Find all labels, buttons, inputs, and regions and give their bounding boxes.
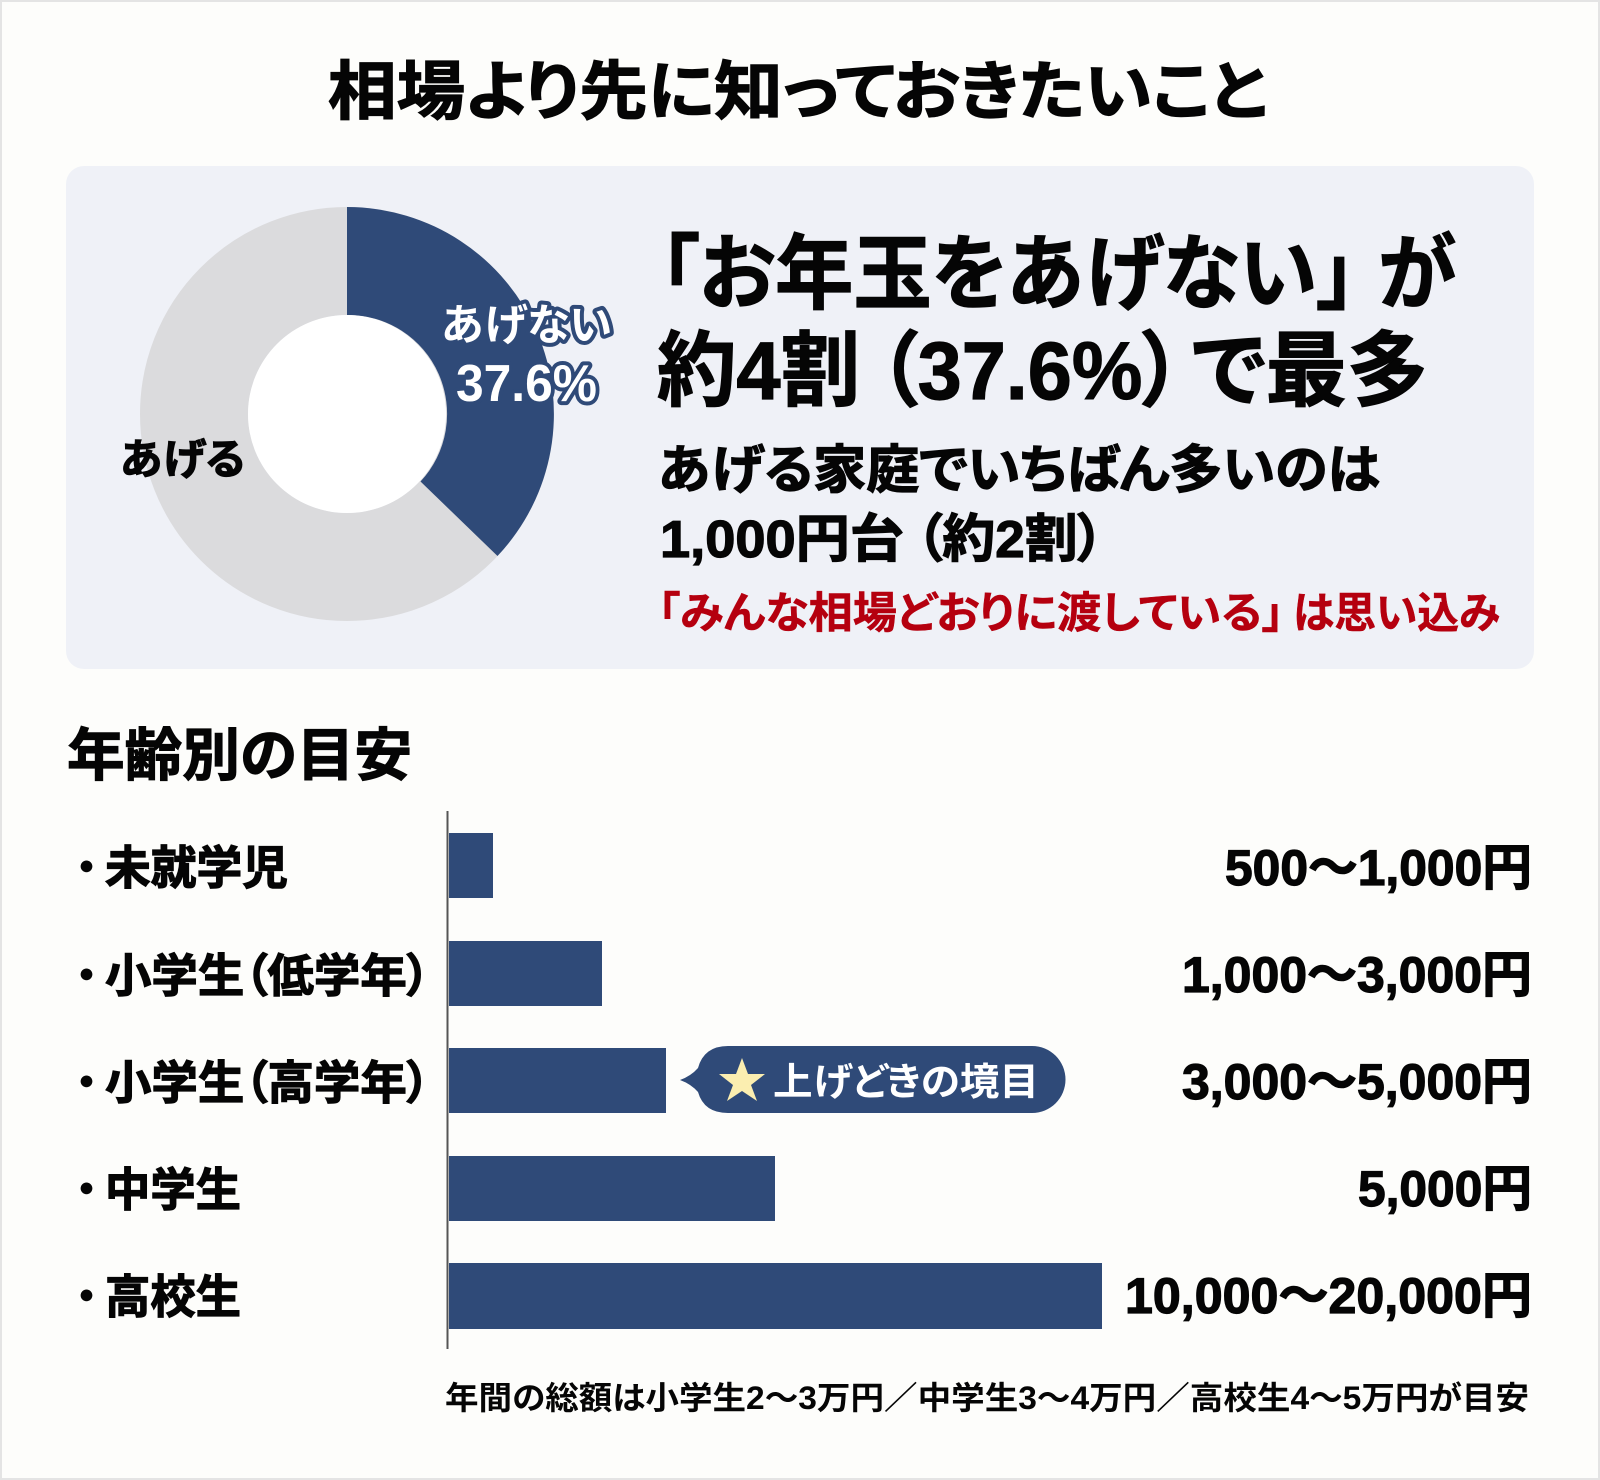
headline: 「お年玉をあげない」 — [660, 229, 1356, 320]
row: junior high: ・ — [75, 1164, 98, 1216]
red callout text: 「みんな相場どおりに渡している」 — [658, 590, 1284, 638]
donut label: does not give: あげない — [441, 302, 612, 350]
row: lower elementary: 1,000〜3,000円 — [1182, 947, 1532, 1003]
bar chart — [75, 811, 1532, 1349]
row: lower elementary: 小学生（低学年） — [105, 950, 430, 1002]
row: lower elementary: ・ — [75, 950, 98, 1002]
row: high school: 10,000〜20,000円 — [1125, 1268, 1532, 1324]
subheading: 1,000円台 — [660, 511, 904, 569]
red callout text: は思い込み — [1293, 590, 1500, 638]
headline: で最多 — [1192, 326, 1428, 417]
donut segment: does not give 37.6% — [347, 207, 554, 556]
row: preschool: 未就学児 — [105, 842, 288, 894]
headline: が — [1378, 229, 1456, 320]
subheading — [658, 442, 1380, 569]
donut chart — [120, 207, 612, 567]
donut label: gives: あげる — [120, 436, 245, 483]
row: high school: ・ — [75, 1271, 98, 1323]
callout: turning point — [680, 1046, 1066, 1113]
row: upper elementary — [75, 1048, 1532, 1113]
subheading: （約2割） — [916, 511, 1104, 569]
row: high school — [75, 1263, 1532, 1329]
donut segment: gives — [194, 261, 500, 567]
section heading: 年齢別の目安 — [67, 724, 412, 788]
headline — [657, 229, 1456, 417]
row: preschool: ・ — [75, 842, 98, 894]
row: junior high: 5,000円 — [1358, 1161, 1532, 1217]
subheading: あげる家庭でいちばん多いのは — [658, 442, 1380, 500]
axis line — [446, 811, 448, 1349]
row: preschool — [75, 833, 1532, 898]
row: lower elementary — [75, 941, 1532, 1006]
row: upper elementary: 3,000〜5,000円 — [1182, 1054, 1532, 1110]
title: 相場より先に知っておきたいこと — [328, 56, 1267, 128]
panel: survey summary — [66, 166, 1534, 669]
row: preschool: 500〜1,000円 — [1225, 840, 1532, 896]
row: junior high: 中学生 — [105, 1164, 241, 1216]
row: upper elementary: 小学生（高学年） — [105, 1057, 430, 1109]
icon: star — [719, 1058, 765, 1101]
callout: turning point: 上げどきの境目 — [773, 1062, 1039, 1104]
donut value: 37.6%: 37.6% — [456, 355, 597, 413]
headline: （37.6%） — [878, 326, 1182, 417]
row: junior high — [75, 1156, 1532, 1221]
headline: 約4割 — [657, 326, 860, 417]
footnote: 年間の総額は小学生2〜3万円／中学生3〜4万円／高校生4〜5万円が目安 — [445, 1380, 1529, 1416]
row: high school: 高校生 — [105, 1271, 241, 1323]
row: upper elementary: ・ — [75, 1057, 98, 1109]
